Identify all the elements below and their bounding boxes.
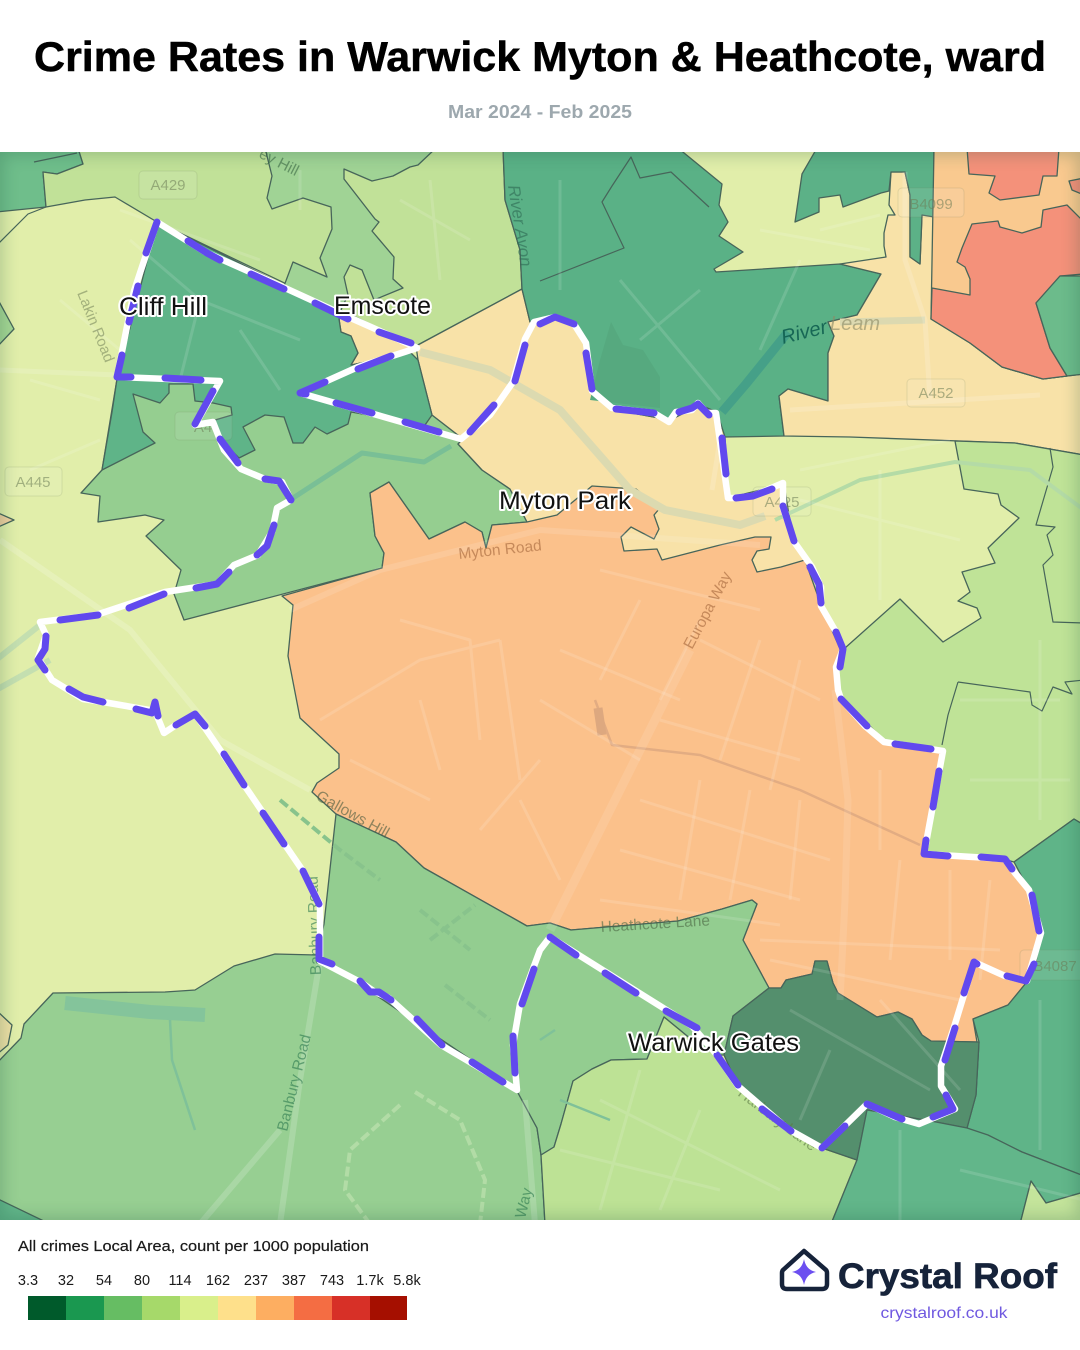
wordmark: Crystal Roof [838, 1257, 1057, 1296]
road and river names [73, 145, 880, 1220]
road number shields: A445 [15, 474, 51, 491]
legend scale labels: 80 [134, 1273, 150, 1289]
crime-rate zones [0, 148, 1080, 1224]
subtle darker interior block [590, 322, 660, 408]
road and river names: River [779, 316, 831, 349]
legend scale labels: 237 [244, 1273, 268, 1289]
neighbourhood labels: Warwick Gates [628, 1029, 799, 1057]
road and river names: Leam [830, 313, 880, 335]
legend scale labels: 5.8k [393, 1273, 421, 1289]
neighbourhood labels: Myton Park [499, 487, 632, 515]
icon: house with star [782, 1251, 827, 1289]
ward boundary: white line with purple dashes [38, 222, 1041, 1148]
road number shields: A425 [764, 494, 800, 511]
legend scale labels: 387 [282, 1273, 306, 1289]
legend scale labels: 3.3 [18, 1273, 38, 1289]
legend scale labels: 32 [58, 1273, 74, 1289]
map edge vignette [0, 152, 1080, 1220]
date range subtitle: Mar 2024 - Feb 2025 [448, 102, 632, 122]
map base: pale area [0, 152, 1080, 1220]
neighbourhood labels [119, 292, 799, 1057]
title: Crime Rates in Warwick Myton & Heathcote, ward [34, 33, 1046, 80]
legend colour swatches [28, 1296, 407, 1320]
road number shields [5, 171, 1080, 980]
road number shields: B4099 [909, 196, 953, 213]
rivers, canal and rail [0, 320, 1080, 1224]
interior boundary lines [0, 153, 1080, 745]
road number shields: A452 [918, 385, 954, 402]
road and river names: Heathcote Lane [600, 912, 710, 936]
road and river names: Way [512, 1186, 536, 1220]
choropleth map [0, 152, 1080, 1220]
street network texture [0, 170, 1080, 1224]
neighbourhood labels: Emscote [334, 292, 431, 320]
legend scale labels: 54 [96, 1273, 112, 1289]
legend scale labels: 114 [168, 1273, 192, 1289]
road and river names: Banbury Road [274, 1033, 315, 1133]
legend title: All crimes Local Area, count per 1000 population [18, 1239, 369, 1255]
website url: crystalroof.co.uk [880, 1305, 1009, 1322]
legend [18, 1239, 421, 1320]
road and river names: Banbury Road [305, 876, 325, 975]
logo: Crystal Roof [780, 1248, 1058, 1322]
road and river names: Gallows Hill [313, 788, 392, 842]
road number shields: A4 [194, 419, 212, 436]
road number shields: A429 [150, 177, 186, 194]
road and river names: River Avon [504, 184, 536, 268]
road and river names: Myton Road [458, 537, 543, 563]
neighbourhood labels: Cliff Hill [119, 293, 207, 321]
road and river names: Harbury Lane [735, 1085, 820, 1155]
road and river names: Europa Way [681, 569, 735, 652]
legend scale labels [18, 1273, 421, 1289]
legend scale labels: 162 [206, 1273, 230, 1289]
legend scale labels: 1.7k [356, 1273, 384, 1289]
road number shields: B4087 [1033, 958, 1077, 975]
legend scale labels: 743 [320, 1273, 344, 1289]
road and river names: Lakin Road [73, 288, 117, 365]
